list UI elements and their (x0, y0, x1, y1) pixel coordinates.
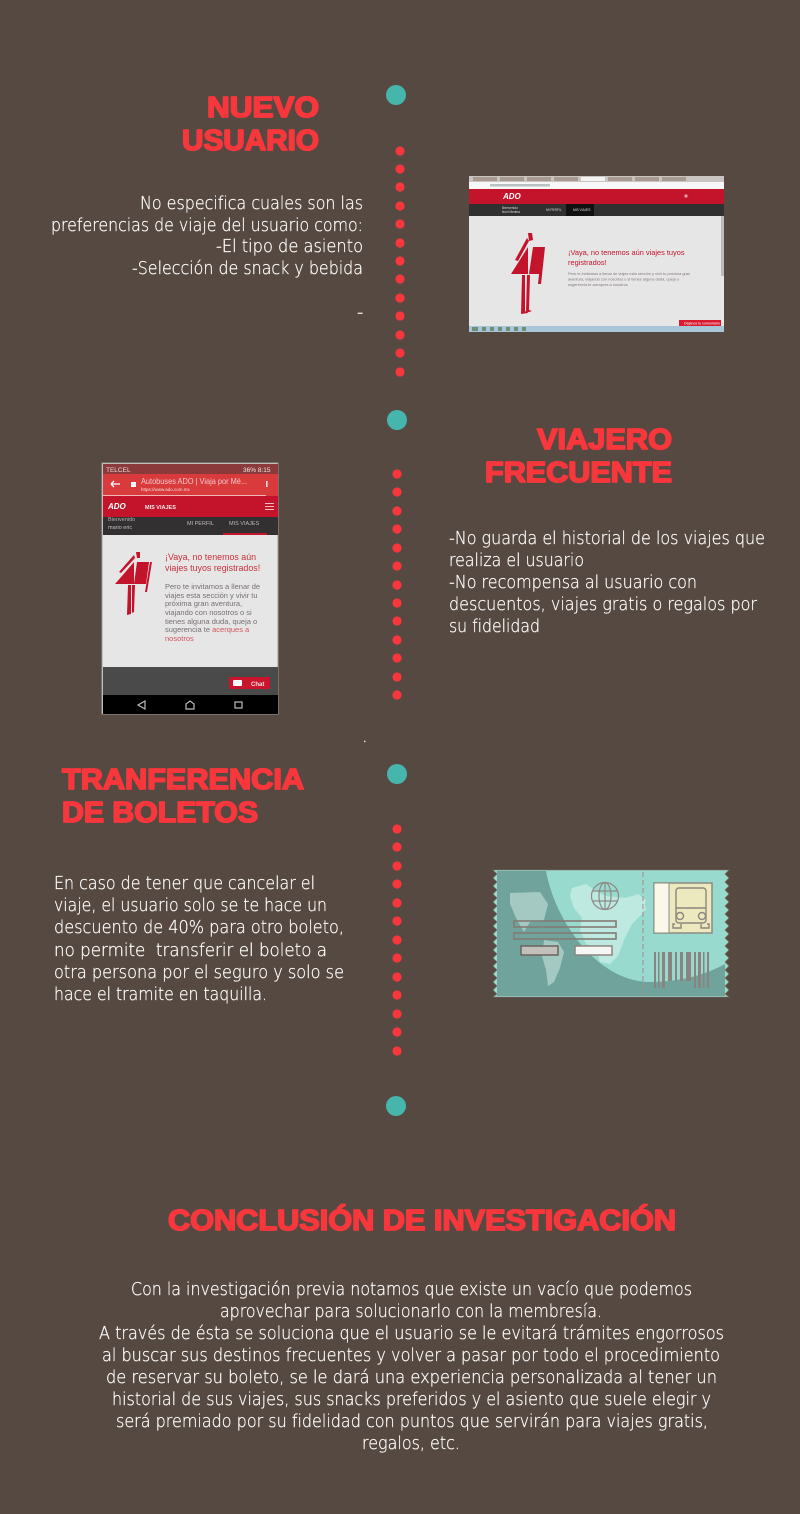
text: transferencia de boletos: viaje, el usuario solo se te hace un (54, 896, 327, 916)
text: transferencia de boletos: En caso de tener que cancelar el (54, 874, 315, 894)
heading: nuevo usuario (182, 92, 319, 157)
screenshot: mobile ADO page: viajes esta sección y vivir tu (165, 591, 258, 600)
screenshot: mobile ADO page: https://www.ado.com.mx (141, 487, 191, 492)
text: nuevo usuario: -El tipo de asiento (216, 237, 363, 257)
heading: transferencia de boletos: TRANFERENCIA (62, 764, 304, 796)
text: viajero frecuente: realiza el usuario (449, 551, 584, 571)
screenshot: desktop ADO page (469, 176, 724, 332)
text: nuevo usuario: - (357, 303, 363, 323)
screenshot: desktop ADO page: MIS VIAJES (573, 208, 591, 212)
screenshot: mobile ADO page: MIS VIAJES (229, 521, 260, 527)
screenshot: mobile ADO page: Chat (251, 682, 264, 688)
screenshot: mobile ADO page (102, 463, 278, 714)
screenshot: mobile ADO page: viajando con nosotros o si (165, 608, 252, 617)
screenshot: mobile ADO page: 36% 8:15 (243, 467, 271, 474)
screenshot: desktop ADO page: MI PERFIL (546, 208, 562, 212)
barcode (654, 952, 709, 988)
text: conclusion: al buscar sus destinos frecuentes y volver a pasar por todo el procedimiento (102, 1346, 720, 1366)
timeline marker 1 (386, 85, 406, 105)
screenshot: mobile ADO page: Bienvenido (108, 517, 135, 523)
illustration: figure (511, 233, 545, 314)
screenshot: desktop ADO page: aventura, viajando con nosotros o si tienes alguna duda, queja o (568, 276, 679, 282)
heading: viajero frecuente (485, 424, 672, 489)
screenshot: desktop ADO page: sugerencia te acerques a nosotros (568, 282, 628, 287)
illustration: bus ticket (493, 870, 729, 997)
heading: viajero frecuente: FRECUENTE (485, 457, 672, 489)
heading: conclusion: CONCLUSIÓN DE INVESTIGACIÓN (168, 1203, 676, 1237)
dotted line 2 (392, 469, 402, 700)
text: viajero frecuente: descuentos, viajes gratis o regalos por (449, 595, 758, 615)
text: conclusion: de reservar su boleto, se le dará una experiencia personalizada al tener un (106, 1368, 717, 1388)
dotted line 3 (392, 824, 402, 1056)
text: viajero frecuente (449, 529, 765, 637)
heading: nuevo usuario: USUARIO (182, 125, 319, 157)
bus panel (654, 883, 712, 933)
dotted line 1 (395, 146, 405, 377)
screenshot: mobile ADO page: Autobuses ADO | Viaja por Mé... (141, 477, 247, 486)
form fields (514, 921, 616, 939)
screenshot: mobile ADO page: TELCEL (106, 467, 131, 474)
heading: transferencia de boletos (62, 764, 304, 829)
text: conclusion: historial de sus viajes, sus snacks preferidos y el asiento que suele elegir y (112, 1390, 711, 1410)
text: nuevo usuario (51, 194, 363, 323)
timeline marker 4 (386, 1096, 406, 1116)
screenshot: desktop ADO page: registrados! (568, 258, 607, 267)
text: viajero frecuente: su fidelidad (449, 617, 540, 637)
text: nuevo usuario: preferencias de viaje del usuario como: (51, 216, 363, 236)
heading: transferencia de boletos: DE BOLETOS (62, 797, 258, 829)
timeline marker 3 (387, 764, 407, 784)
screenshot: mobile ADO page: nosotros (165, 634, 194, 643)
screenshot: mobile ADO page: Pero te invitamos a llenar de (165, 582, 260, 591)
text: nuevo usuario: No especifica cuales son las (140, 194, 363, 214)
screenshot: mobile ADO page: mario eric (108, 525, 132, 531)
logo: ADO (502, 192, 522, 201)
screenshot: mobile ADO page: MI PERFIL (187, 521, 214, 527)
text: conclusion: A través de ésta se soluciona que el usuario se le evitará trámites engorrosos (99, 1324, 724, 1344)
screenshot: desktop ADO page: Noel Medina (502, 210, 520, 214)
text: transferencia de boletos (54, 874, 344, 1005)
heading: nuevo usuario: NUEVO (207, 92, 319, 124)
text: transferencia de boletos: descuento de 40% para otro boleto, (54, 918, 344, 938)
text: conclusion: será premiado por su fidelidad con puntos que servirán para viajes gratis, (116, 1412, 708, 1432)
screenshot: mobile ADO page: viajes tuyos registrados! (165, 563, 260, 573)
text: conclusion: Con la investigación previa notamos que existe un vacío que podemos (131, 1280, 692, 1300)
shaded area (497, 871, 725, 996)
screenshot: mobile ADO page: ADO (107, 502, 127, 511)
text: transferencia de boletos: hace el tramite en taquilla. (54, 985, 267, 1005)
illustration: figure (115, 552, 152, 615)
screenshot: desktop ADO page: Pero te invitamos a llenar de viajes esta sección y vivir tu próxima gran (568, 271, 690, 276)
text: viajero frecuente: -No recompensa al usuario con (449, 573, 697, 593)
world map (570, 884, 646, 964)
screenshot: desktop ADO page: Déjanos tu comentario (684, 322, 720, 326)
screenshot: mobile ADO page: próxima gran aventura, (165, 599, 242, 608)
screenshot: mobile ADO page: MIS VIAJES (145, 505, 176, 511)
screenshot: mobile ADO page: tienes alguna duda, queja o (165, 617, 257, 626)
screenshot: mobile ADO page: ¡Vaya, no tenemos aún (165, 552, 256, 562)
globe icon (592, 882, 618, 910)
dot mark: . (362, 727, 368, 747)
text: nuevo usuario: -Selección de snack y bebida (132, 259, 363, 279)
screenshot: desktop ADO page: Bienvenido (502, 206, 518, 210)
text: transferencia de boletos: otra persona por el seguro y solo se (54, 963, 344, 983)
screenshot: desktop ADO page: ¡Vaya, no tenemos aún viajes tuyos (568, 248, 685, 257)
heading: viajero frecuente: VIAJERO (537, 424, 672, 456)
text: conclusion: regalos, etc. (362, 1434, 460, 1454)
screenshot: mobile ADO page: sugerencia te acerques a (165, 625, 250, 634)
text: viajero frecuente: -No guarda el historial de los viajes que (449, 529, 765, 549)
text: conclusion: aprovechar para solucionarlo con la membresía. (220, 1302, 602, 1322)
text: transferencia de boletos: no permite transferir el boleto a (54, 941, 327, 961)
text: conclusion (99, 1280, 724, 1454)
timeline marker 2 (387, 410, 407, 430)
divider (642, 872, 644, 995)
